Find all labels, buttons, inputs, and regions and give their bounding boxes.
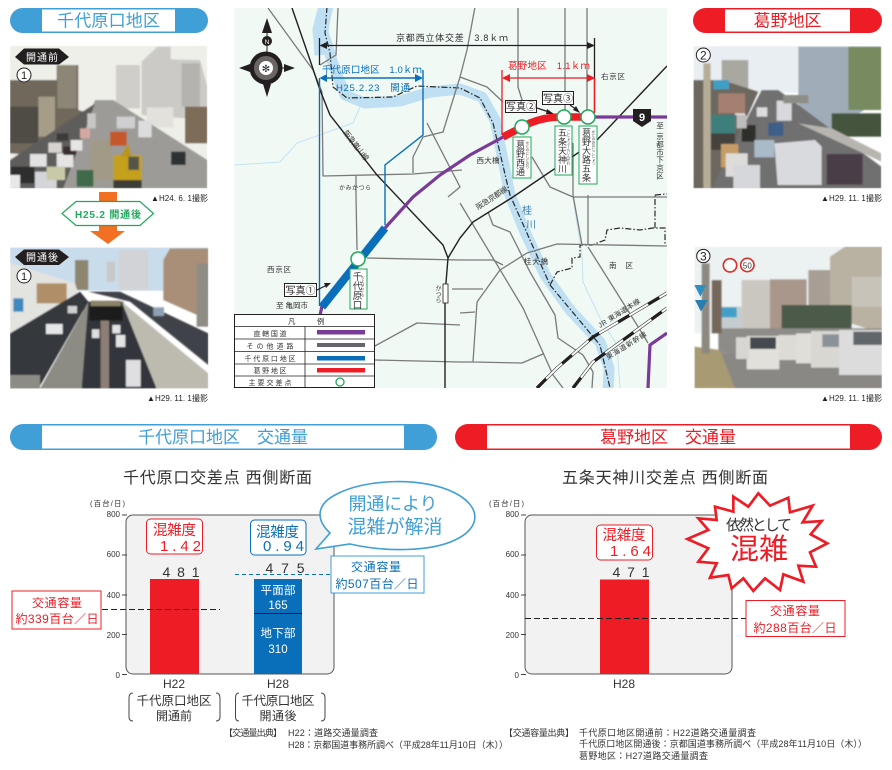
bracket: 葛野地区 1.1km: 葛野地区 1.1ｋｍ bbox=[508, 60, 590, 72]
legend: 凡 bbox=[288, 317, 296, 326]
place names: 川 bbox=[526, 220, 536, 231]
place names: 右京区 bbox=[601, 71, 626, 81]
place names: かみかつら bbox=[339, 185, 371, 192]
congestion: 1.64: 混雑度 bbox=[602, 527, 646, 544]
burst: 依然として混雑 bbox=[687, 493, 827, 591]
source note: 交通容量出典 bbox=[504, 727, 867, 761]
congestion: 0.94 bbox=[250, 520, 306, 555]
axis labels: 開通前 bbox=[156, 708, 192, 723]
callout: 交通容量 507: 交通容量 bbox=[351, 560, 401, 574]
callout: H25.2 開通後 bbox=[62, 202, 154, 226]
intersection: 千代原口: 千代原口 bbox=[350, 272, 362, 310]
heading: 葛野地区: 葛野地区 bbox=[754, 12, 822, 30]
chart title: 五条天神川交差点: 五条天神川交差点 西側断面 bbox=[562, 469, 768, 487]
intersection: 葛野西通 bbox=[513, 120, 531, 178]
axis: 200 bbox=[506, 631, 520, 640]
route: 千代原口 blue bbox=[322, 228, 385, 307]
heading: 葛野地区 bbox=[693, 8, 882, 33]
boundary lines bbox=[325, 7, 667, 388]
axis: 200 bbox=[107, 631, 121, 640]
axis labels bbox=[129, 677, 325, 723]
dashed line: capacity 507 bbox=[235, 574, 331, 576]
bar: H28: 475 bbox=[266, 560, 305, 576]
heading: 葛野地区 交通量: 葛野地区 交通量 bbox=[600, 428, 736, 447]
photo: before opening bbox=[10, 46, 207, 188]
route: 葛野 red bbox=[503, 117, 590, 137]
label: 写真③ bbox=[542, 92, 580, 113]
place names: 阪急嵐山線 bbox=[341, 128, 372, 163]
speech bubble: 開通により混雑が解消: 混雑が解消 bbox=[348, 516, 442, 538]
callout: 交通容量 288: 約288百台／日 bbox=[754, 620, 836, 635]
marker: ③ bbox=[697, 249, 710, 263]
axis: 0 bbox=[116, 671, 121, 680]
axis labels: 千代原口地区 bbox=[136, 694, 212, 708]
photo: after opening bbox=[10, 247, 208, 389]
badge: 開通前: 1 bbox=[21, 70, 27, 82]
caption: H29.11.1: ▲H29. 11. 1撮影 bbox=[821, 393, 882, 403]
axis bbox=[489, 498, 526, 680]
badge: 開通後: 1 bbox=[21, 271, 27, 283]
intersection: 葛野大路五条: 葛野大路五条 bbox=[581, 127, 591, 183]
legend bbox=[234, 314, 375, 388]
heading: 千代原口地区 交通量: 千代原口地区 交通量 bbox=[138, 428, 308, 447]
source note: 交通容量出典: 千代原口地区開通後：京都国道事務所調べ（平成28年11月10日（木）） bbox=[579, 738, 867, 749]
source note: 交通量出典: H28：京都国道事務所調べ（平成28年11月10日（木）） bbox=[288, 739, 508, 750]
axis: 800 bbox=[506, 510, 520, 519]
legend: 千代原口地区 bbox=[244, 354, 296, 363]
map bbox=[234, 2, 667, 392]
marker: ② bbox=[696, 48, 710, 63]
route: purple national road bbox=[319, 117, 667, 388]
axis label: H28 bbox=[613, 677, 635, 691]
badge: 開通後 bbox=[15, 250, 69, 283]
intersection: 五条天神川: 五条天神川 bbox=[557, 128, 567, 173]
label: 写真① bbox=[284, 283, 331, 297]
place names bbox=[267, 71, 664, 362]
bar: H28: 165 bbox=[268, 600, 288, 612]
bar: H22: 481 bbox=[162, 564, 200, 580]
chart: 千代原口 bbox=[90, 498, 334, 723]
callout: 交通容量 288: 交通容量 bbox=[770, 604, 820, 618]
place names: 至 京都市下京区 bbox=[655, 122, 664, 180]
roads: gray bbox=[268, 7, 667, 388]
speech bubble: 開通により混雑が解消 bbox=[316, 482, 475, 550]
caption: H24.6.1: ▲H24. 6. 1撮影 bbox=[151, 193, 208, 203]
axis bbox=[90, 498, 127, 680]
place names: 西京区 bbox=[267, 265, 292, 274]
legend: 例 bbox=[317, 316, 324, 326]
legend: 直轄国道 bbox=[254, 329, 286, 338]
source note: 交通量出典: H22：道路交通量調査 bbox=[288, 727, 378, 738]
bracket: 千代原口地区 1.0km bbox=[320, 64, 423, 306]
label: 写真③: 写真③ bbox=[543, 92, 573, 105]
bar: H22 bbox=[150, 564, 200, 674]
congestion: 1.42: 1.42 bbox=[160, 538, 201, 555]
place names: 西大橋 bbox=[476, 155, 500, 165]
legend: 葛野地区 bbox=[254, 366, 286, 375]
callout: 交通容量 339 bbox=[12, 591, 101, 629]
heading: 葛野地区 交通量 bbox=[455, 424, 882, 450]
place names: 阪急京都線 bbox=[474, 183, 510, 212]
intersection: 葛野大路五条: かどのおおじごじょう bbox=[591, 129, 596, 166]
congestion: 1.64: 1.64 bbox=[610, 543, 651, 560]
place names: 桂大橋 bbox=[524, 256, 548, 266]
badge: 開通後: 開通後 bbox=[26, 251, 58, 264]
legend: その他道路 bbox=[246, 342, 294, 350]
congestion: 1.64 bbox=[596, 525, 652, 560]
bracket: 千代原口地区 1.0km: H25.2.23 開通 bbox=[336, 83, 410, 94]
compass bbox=[239, 18, 295, 97]
axis: 600 bbox=[107, 550, 121, 559]
axis: (百台/日) bbox=[90, 498, 126, 508]
source note: 交通量出典 bbox=[224, 727, 508, 750]
badge: 開通前: 開通前 bbox=[26, 51, 58, 64]
congestion: 0.94: 混雑度 bbox=[256, 524, 299, 541]
bracket: 3.8km: 京都西立体交差 3.8ｋｍ bbox=[396, 32, 508, 43]
place names: 東海道新幹線 bbox=[604, 330, 648, 362]
photo: 葛野 ② bbox=[693, 46, 881, 188]
bar: H28: 471 bbox=[612, 564, 650, 580]
callout: 交通容量 507: 約507百台／日 bbox=[336, 576, 418, 591]
burst: 依然として混雑: 混雑 bbox=[730, 533, 788, 566]
callout: 交通容量 339: 約339百台／日 bbox=[16, 611, 98, 626]
intersection: 葛野大路五条 bbox=[579, 110, 597, 184]
legend: 主要交差点 bbox=[248, 378, 292, 387]
bar: H28: 310 bbox=[268, 644, 288, 656]
railway: 阪急 bbox=[292, 8, 667, 388]
intersection: 千代原口 bbox=[350, 252, 367, 310]
bar: H28 bbox=[600, 564, 650, 674]
place names: JR 東海道本線 bbox=[596, 297, 642, 330]
heading: 千代原口地区: 千代原口地区 bbox=[57, 12, 160, 30]
intersection: 葛野西通: かどのにしどおり bbox=[525, 140, 530, 170]
source note: 交通量出典: 【交通量出典】 bbox=[224, 727, 282, 738]
axis: 400 bbox=[107, 591, 121, 600]
badge: 開通前 bbox=[15, 48, 69, 82]
arrow: orange down bbox=[90, 192, 125, 244]
place names: 至 亀岡市 bbox=[276, 300, 308, 310]
marker: ③: 3 bbox=[700, 249, 707, 263]
marker: ②: 2 bbox=[700, 49, 707, 63]
dashed line: capacity 288 bbox=[525, 618, 746, 620]
callout: 交通容量 288 bbox=[746, 600, 845, 636]
congestion: 1.42 bbox=[146, 519, 202, 555]
icon: route 9: 9 bbox=[639, 112, 645, 124]
source note: 交通容量出典: 千代原口地区開通前：H22道路交通量調査 bbox=[579, 727, 756, 738]
compass: N bbox=[265, 39, 270, 46]
bar: H28: 平面部 bbox=[260, 584, 296, 597]
caption: H29.11.1: ▲H29. 11. 1撮影 bbox=[821, 193, 882, 203]
label: 写真①: 写真① bbox=[286, 284, 316, 297]
axis: 600 bbox=[506, 550, 520, 559]
intersection: 葛野西通: 葛野西通 bbox=[515, 139, 525, 177]
burst: 依然として混雑: 依然として bbox=[726, 517, 792, 534]
place names: 桂 bbox=[522, 204, 532, 217]
place names: 南 区 bbox=[609, 260, 634, 270]
railway: JR and 新幹線 bbox=[537, 293, 667, 388]
callout: 交通容量 507 bbox=[331, 556, 424, 593]
bracket: 3.8km bbox=[320, 32, 595, 112]
photo: 葛野 ③: 50 bbox=[743, 261, 752, 270]
congestion: 0.94: 0.94 bbox=[263, 538, 304, 555]
axis labels: H28 bbox=[267, 677, 289, 691]
callout: H25.2 開通後: H25.2 開通後 bbox=[75, 208, 141, 221]
axis: 0 bbox=[515, 671, 520, 680]
intersection: 五条天神川 bbox=[555, 110, 572, 175]
source note: 交通容量出典: 葛野地区：H27道路交通量調査 bbox=[579, 750, 708, 761]
axis: 800 bbox=[107, 510, 121, 519]
speech bubble: 開通により混雑が解消: 開通により bbox=[348, 494, 438, 514]
axis labels: 千代原口地区 bbox=[242, 694, 314, 708]
source note: 交通容量出典: 【交通容量出典】 bbox=[504, 727, 574, 738]
congestion: 1.42: 混雑度 bbox=[153, 522, 196, 539]
callout: 交通容量 339: 交通容量 bbox=[32, 596, 82, 610]
river: 桂川 bbox=[234, 2, 620, 392]
chart title: 千代原口交差点: 千代原口交差点 西側断面 bbox=[123, 469, 312, 487]
place names: かつら bbox=[434, 285, 441, 304]
label: 写真② bbox=[506, 100, 554, 114]
bracket: 葛野地区 1.1km bbox=[502, 60, 595, 135]
axis labels: 開通後 bbox=[260, 709, 296, 723]
station: かつら bbox=[443, 284, 448, 303]
dashed line: capacity 339 bbox=[102, 608, 220, 610]
intersection: 千代原口: ちよはらぐち bbox=[360, 276, 365, 298]
caption: H29.11.1: ▲H29. 11. 1撮影 bbox=[147, 393, 208, 403]
icon: route 9 bbox=[633, 109, 651, 127]
bar: H28 bbox=[254, 560, 305, 674]
photo: 葛野 ③ bbox=[694, 247, 882, 388]
axis: 400 bbox=[506, 591, 520, 600]
heading: 千代原口地区 bbox=[10, 8, 208, 33]
bracket: 千代原口地区 1.0km: 千代原口地区 1.0ｋｍ bbox=[322, 64, 422, 76]
heading: 千代原口地区 交通量 bbox=[10, 424, 437, 450]
axis labels: H22 bbox=[163, 677, 185, 691]
compass: ✻ bbox=[262, 64, 270, 75]
label: 写真②: 写真② bbox=[506, 100, 536, 113]
chart: 葛野 bbox=[489, 498, 746, 691]
intersection: 五条天神川: ごじょうてんじんがわ bbox=[566, 129, 571, 166]
axis: (百台/日) bbox=[489, 498, 524, 508]
bar: H28: 地下部 bbox=[260, 627, 296, 640]
